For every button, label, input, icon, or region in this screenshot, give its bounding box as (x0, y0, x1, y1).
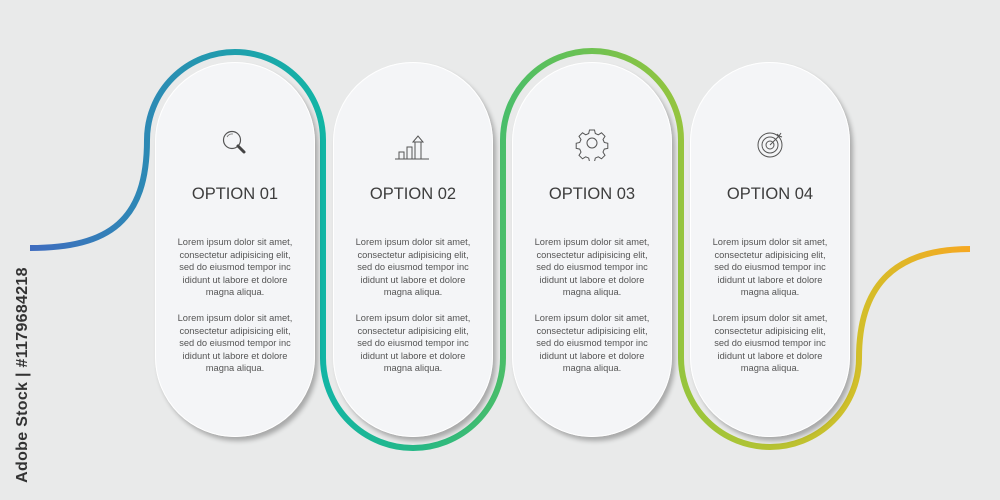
watermark vertical text: Adobe Stock | #1179684218 (14, 267, 31, 483)
icon: bar chart (395, 135, 429, 160)
heading: OPTION 02 (370, 185, 456, 203)
icon: gear (576, 130, 608, 161)
text block 2: Lorem ipsum dolor sit amet, (713, 313, 827, 323)
heading: OPTION 04 (727, 185, 813, 203)
text block: sed do eiusmod tempor inc (714, 262, 826, 272)
text block: consectetur adipisicing elit, (179, 250, 291, 260)
text block 2: ididunt ut labore et dolore (540, 350, 644, 360)
text block 2: sed do eiusmod tempor inc (179, 338, 291, 348)
text block 2: Lorem ipsum dolor sit amet, (356, 313, 470, 323)
text block 2: sed do eiusmod tempor inc (536, 338, 648, 348)
text block: magna aliqua. (384, 287, 442, 297)
text block: consectetur adipisicing elit, (536, 250, 648, 260)
panel: option 03 (512, 62, 672, 437)
text block: magna aliqua. (563, 287, 621, 297)
text block (178, 237, 292, 297)
text block: consectetur adipisicing elit, (714, 250, 826, 260)
text block: ididunt ut labore et dolore (183, 274, 287, 284)
text block (535, 237, 649, 297)
text block (713, 237, 827, 297)
text block: Lorem ipsum dolor sit amet, (356, 237, 470, 247)
text block: ididunt ut labore et dolore (361, 274, 465, 284)
text block: Lorem ipsum dolor sit amet, (535, 237, 649, 247)
text block 2: sed do eiusmod tempor inc (714, 338, 826, 348)
text block: ididunt ut labore et dolore (540, 274, 644, 284)
text block: magna aliqua. (206, 287, 264, 297)
icon: magnifier (222, 130, 246, 154)
text block 2: ididunt ut labore et dolore (183, 350, 287, 360)
icon: target (758, 132, 782, 158)
text block: consectetur adipisicing elit, (357, 250, 469, 260)
text block 2: magna aliqua. (741, 363, 799, 373)
panel: option 01 (155, 62, 315, 437)
text block: sed do eiusmod tempor inc (536, 262, 648, 272)
text block 2: consectetur adipisicing elit, (536, 326, 648, 336)
text block: magna aliqua. (741, 287, 799, 297)
text block 2 (178, 313, 292, 373)
text block 2 (713, 313, 827, 373)
text block 2: sed do eiusmod tempor inc (357, 338, 469, 348)
text block 2 (535, 313, 649, 373)
text block 2: consectetur adipisicing elit, (357, 326, 469, 336)
text block: sed do eiusmod tempor inc (179, 262, 291, 272)
text block 2: Lorem ipsum dolor sit amet, (535, 313, 649, 323)
text block: Lorem ipsum dolor sit amet, (713, 237, 827, 247)
text block 2: magna aliqua. (563, 363, 621, 373)
text block: Lorem ipsum dolor sit amet, (178, 237, 292, 247)
heading: OPTION 01 (192, 185, 278, 203)
panel: option 04 (690, 62, 850, 437)
text block 2: consectetur adipisicing elit, (179, 326, 291, 336)
text block (356, 237, 470, 297)
heading: OPTION 03 (549, 185, 635, 203)
text block 2: ididunt ut labore et dolore (718, 350, 822, 360)
text block 2: magna aliqua. (206, 363, 264, 373)
text block: sed do eiusmod tempor inc (357, 262, 469, 272)
text block 2: magna aliqua. (384, 363, 442, 373)
text block: ididunt ut labore et dolore (718, 274, 822, 284)
text block 2: ididunt ut labore et dolore (361, 350, 465, 360)
text block 2 (356, 313, 470, 373)
text block 2: consectetur adipisicing elit, (714, 326, 826, 336)
text block 2: Lorem ipsum dolor sit amet, (178, 313, 292, 323)
panel: option 02 (333, 62, 493, 437)
